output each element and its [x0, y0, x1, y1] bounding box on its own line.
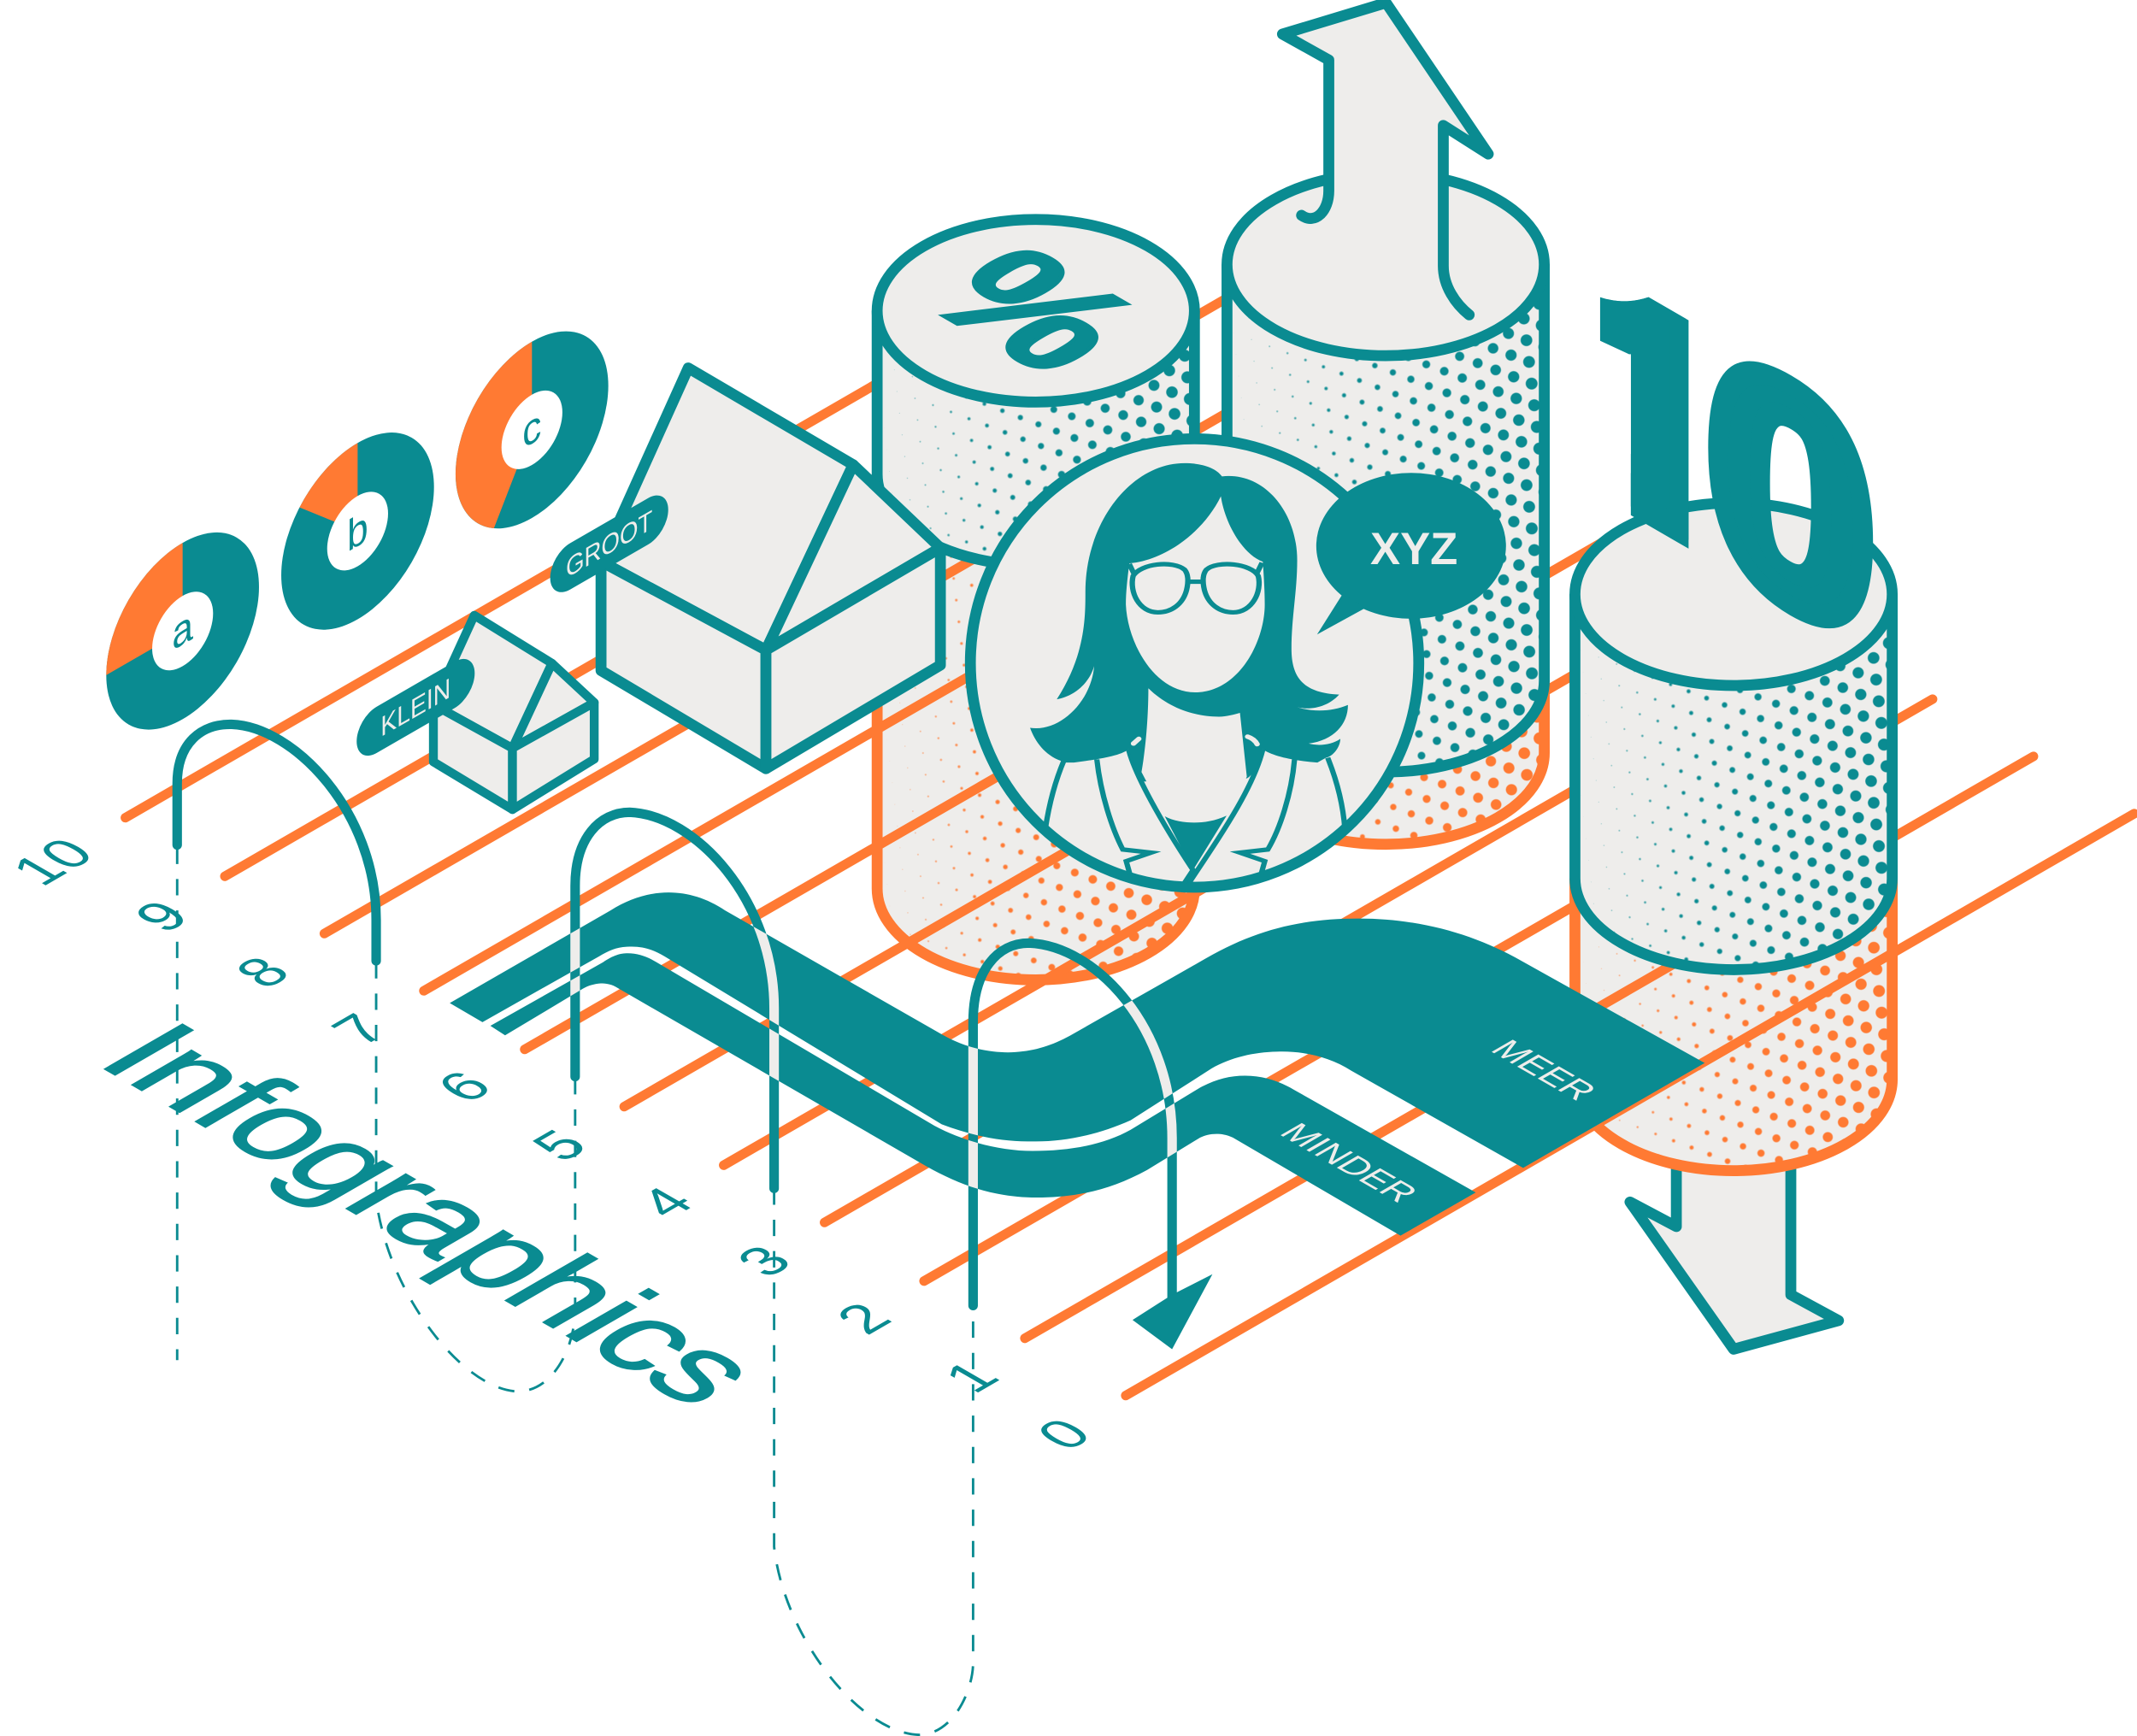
arc from 9 to 7 — [177, 724, 376, 961]
dashed line from 9 — [176, 848, 178, 1360]
cylinder with number ten: 1 — [1581, 183, 1739, 638]
big house — [601, 368, 940, 768]
speech bubble xyz: XYZ — [1370, 524, 1457, 574]
arc from 1 to arrow — [973, 943, 1172, 1305]
axis numbers: 6 — [423, 1062, 506, 1111]
axis numbers — [0, 830, 1105, 1458]
axis numbers: 0 — [1022, 1410, 1105, 1458]
arrow down below ten cylinder — [1630, 1169, 1839, 1349]
speech bubble xyz — [1316, 473, 1506, 634]
orange lower part of percent cylinder — [877, 463, 1194, 988]
band meer — [450, 892, 1704, 1168]
axis numbers: 5 — [518, 1121, 602, 1169]
donut chart a: a — [172, 599, 193, 660]
cylinder with up arrow — [1227, 3, 1545, 849]
face — [1126, 497, 1265, 692]
axis numbers: 8 — [221, 948, 304, 997]
woman portrait — [1030, 463, 1348, 883]
label: klein — [356, 650, 474, 764]
donut chart b: b — [347, 501, 368, 562]
arc from 5 to 3 — [575, 812, 774, 1188]
label: klein: KLEIN — [380, 671, 450, 743]
jacket lines — [1045, 750, 1345, 883]
portrait circle — [970, 438, 1419, 887]
neck and chest — [1141, 688, 1247, 822]
cylinder with number ten: 0 — [1706, 274, 1875, 718]
axis numbers: 1 — [930, 1353, 1013, 1401]
cylinder with percent sign — [877, 220, 1194, 569]
axis numbers: 10 — [0, 830, 109, 894]
donut chart c: c — [522, 398, 541, 458]
orange lower part of ten cylinder — [1575, 872, 1893, 1174]
earrings — [1133, 737, 1257, 744]
orange axis lines 10 to 0 — [126, 261, 2134, 1396]
inverted arc segments over bands — [570, 927, 1177, 1189]
donut chart b — [281, 399, 434, 663]
donut chart a — [106, 499, 259, 763]
label: groot — [550, 486, 668, 601]
label: minder: MINDER — [1271, 1117, 1428, 1208]
dashed curve from 7 to 5 — [376, 962, 575, 1392]
glasses — [1129, 562, 1262, 612]
label: meer: MEER — [1482, 1034, 1606, 1105]
axis numbers: 7 — [318, 1005, 401, 1054]
arrow head — [1133, 1274, 1212, 1349]
top — [1165, 815, 1227, 870]
axis numbers: 4 — [625, 1179, 708, 1227]
cylinder with number ten — [1569, 297, 1898, 975]
hair — [1030, 463, 1348, 781]
dashed curve from 3 to 1 — [774, 1188, 973, 1735]
donut chart c — [456, 297, 609, 562]
axis numbers: 9 — [121, 892, 203, 940]
cylinder with percent sign: % — [886, 223, 1185, 396]
axis numbers: 2 — [822, 1294, 905, 1343]
title: Infographics — [69, 1004, 795, 1423]
axis numbers: 3 — [722, 1237, 806, 1286]
band minder — [491, 953, 1475, 1236]
label: groot: GROOT — [566, 503, 652, 585]
small house — [433, 615, 594, 809]
